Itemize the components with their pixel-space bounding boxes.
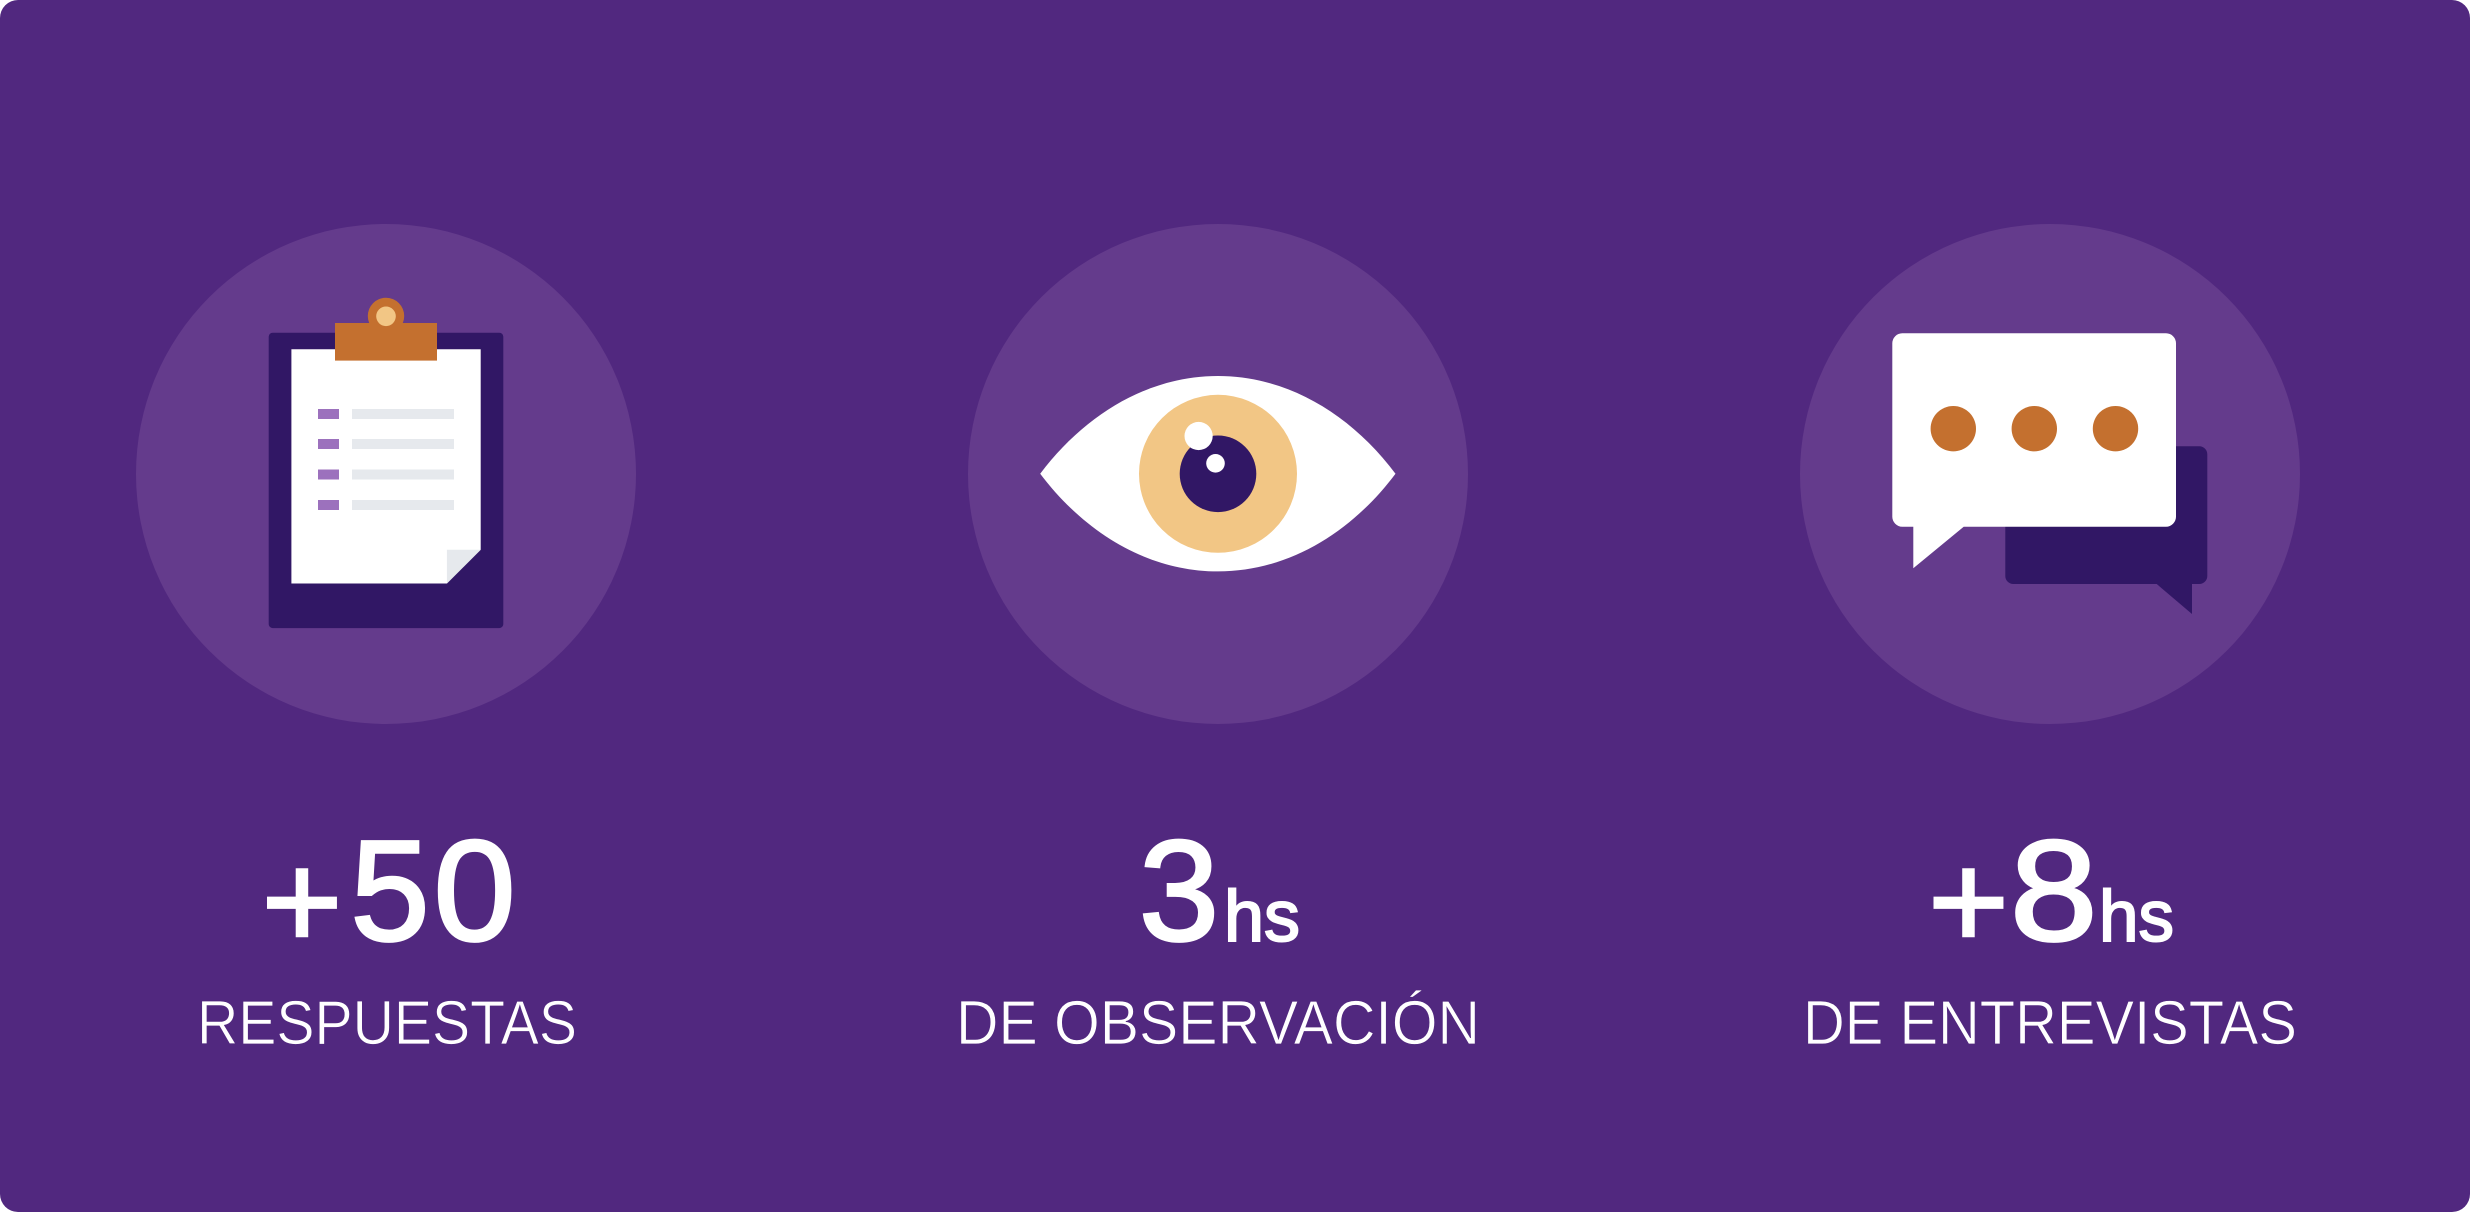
stat: +50: 5 (350, 812, 430, 971)
stat: +50: + (262, 825, 342, 977)
panel: respuestas (136, 224, 636, 1058)
icon: eye (1040, 376, 1396, 571)
back bubble (2005, 446, 2207, 614)
large highlight (1184, 422, 1213, 450)
iris (1139, 395, 1297, 553)
eye white (1040, 376, 1396, 571)
stat: +8hs: + (1928, 825, 2009, 977)
stat: +50 (262, 812, 516, 977)
small highlight (1206, 454, 1225, 473)
badge circle (136, 224, 636, 724)
clip (335, 298, 437, 361)
badge circle (1800, 224, 2300, 724)
paper fold (447, 550, 481, 584)
label: de observación: DE OBSERVACIÓN (956, 989, 1480, 1058)
icon: clipboard (269, 298, 503, 628)
panel: entrevistas (1800, 224, 2300, 1058)
paper sheet (291, 349, 481, 584)
clipboard board (269, 333, 503, 628)
label: de entrevistas: DE ENTREVISTAS (1803, 989, 2297, 1058)
panel: observación (956, 224, 1480, 1058)
icon: chat bubbles (1892, 333, 2207, 614)
badge circle (968, 224, 1468, 724)
checklist (318, 409, 454, 510)
pupil (1180, 436, 1256, 512)
stat: 3hs (1139, 812, 1300, 971)
stat: +8hs (1928, 812, 2174, 977)
typing dots (1931, 406, 2138, 451)
label: respuestas: RESPUESTAS (197, 989, 577, 1058)
stat: 3hs: 3 (1139, 812, 1219, 971)
stat: +8hs: 8 (2010, 812, 2098, 971)
stat: +8hs: hs (2099, 877, 2174, 957)
stat: 3hs: hs (1224, 877, 1300, 957)
front bubble (1892, 333, 2176, 568)
stat: +50: 0 (434, 812, 516, 971)
